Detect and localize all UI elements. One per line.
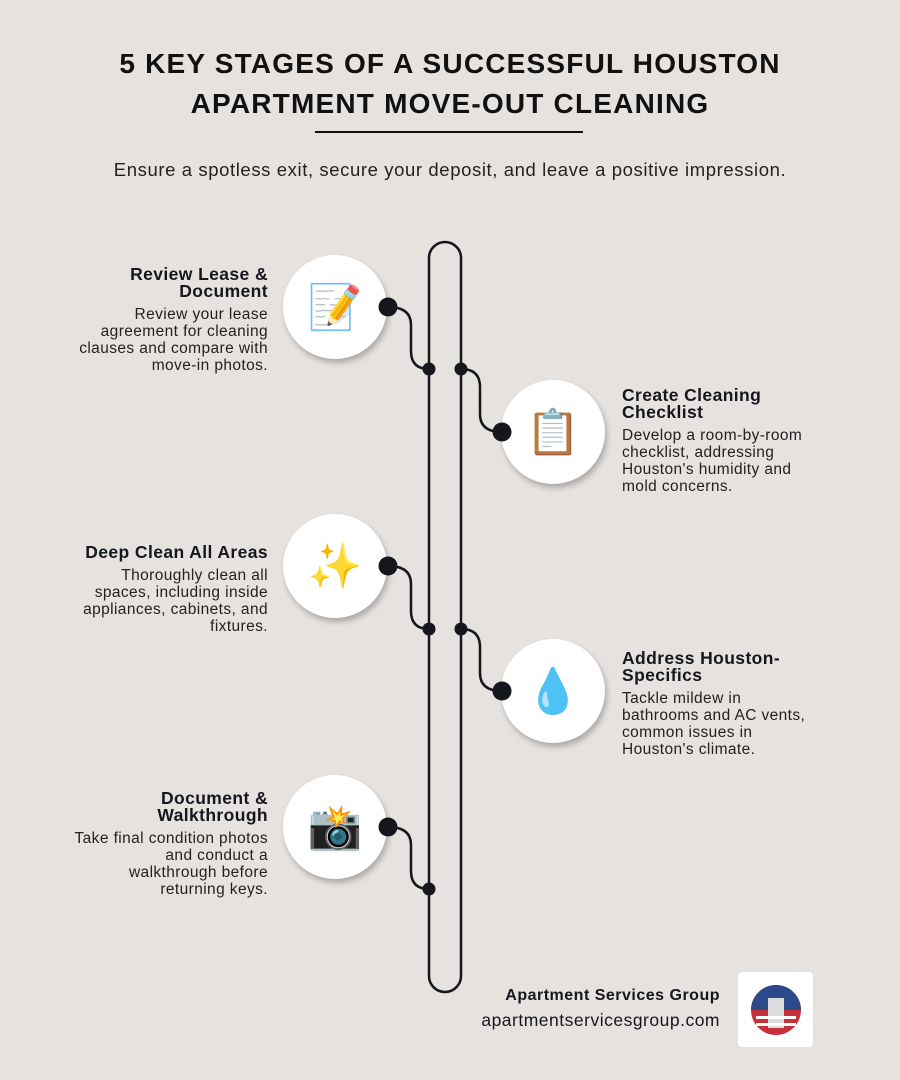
step 5 text: returning keys. bbox=[160, 881, 268, 898]
step 5 text: Document & bbox=[161, 788, 268, 808]
step 1 text: clauses and compare with bbox=[79, 340, 268, 357]
step 4 text: Specifics bbox=[622, 665, 702, 685]
icon: camera bbox=[283, 775, 387, 879]
step 5 text: Walkthrough bbox=[157, 805, 268, 825]
footer brand: Apartment Services Group bbox=[505, 987, 720, 1004]
step 5 text: walkthrough before bbox=[129, 864, 268, 881]
footer brand: apartmentservicesgroup.com bbox=[481, 1010, 720, 1030]
step 3 text: appliances, cabinets, and bbox=[83, 601, 268, 618]
icon: memo: 📝 bbox=[308, 282, 362, 333]
step 4 text: Address Houston- bbox=[622, 648, 780, 668]
icon: sparkles bbox=[283, 514, 387, 618]
icon: water drop bbox=[501, 639, 605, 743]
step 2 text: mold concerns. bbox=[622, 478, 733, 495]
icon: clipboard bbox=[501, 380, 605, 484]
step 1 text: move-in photos. bbox=[152, 357, 268, 374]
icon: clipboard: 📋 bbox=[526, 407, 580, 458]
step 5 text: and conduct a bbox=[165, 847, 268, 864]
step 2 text: Houston's humidity and bbox=[622, 461, 791, 478]
step 1 text: agreement for cleaning bbox=[101, 323, 268, 340]
title underline bbox=[315, 131, 583, 133]
step 1 text bbox=[79, 264, 268, 374]
step 5 text bbox=[74, 788, 268, 898]
subtitle: Ensure a spotless exit, secure your deposit, and leave a positive impression. bbox=[114, 159, 786, 180]
step 4 text: common issues in bbox=[622, 724, 752, 741]
icon: water drop: 💧 bbox=[526, 666, 580, 717]
icon: camera: 📸 bbox=[308, 802, 362, 853]
step 4 text: Houston's climate. bbox=[622, 741, 755, 758]
step 2 text: Create Cleaning bbox=[622, 385, 761, 405]
step 3 text: fixtures. bbox=[210, 618, 268, 635]
step 1 text: Review your lease bbox=[135, 306, 268, 323]
icon: sparkles: ✨ bbox=[308, 541, 362, 592]
step 4 text bbox=[622, 648, 805, 758]
icon: memo bbox=[283, 255, 387, 359]
step 1 text: Document bbox=[179, 281, 268, 301]
step 3 text: spaces, including inside bbox=[95, 584, 268, 601]
step 4 text: bathrooms and AC vents, bbox=[622, 707, 805, 724]
step 1 text: Review Lease & bbox=[130, 264, 268, 284]
step 4 text: Tackle mildew in bbox=[622, 690, 741, 707]
title: APARTMENT MOVE-OUT CLEANING bbox=[191, 88, 709, 119]
step 5 text: Take final condition photos bbox=[75, 830, 268, 847]
step 2 text: checklist, addressing bbox=[622, 444, 774, 461]
step 3 text: Thoroughly clean all bbox=[121, 567, 268, 584]
title: 5 KEY STAGES OF A SUCCESSFUL HOUSTON bbox=[119, 48, 781, 79]
step 2 text: Checklist bbox=[622, 402, 703, 422]
title bbox=[119, 48, 781, 119]
step 2 text bbox=[622, 385, 802, 495]
step 2 text: Develop a room-by-room bbox=[622, 427, 802, 444]
footer brand bbox=[481, 987, 720, 1030]
step 3 text: Deep Clean All Areas bbox=[85, 542, 268, 562]
logo bbox=[738, 972, 813, 1047]
step 3 text bbox=[83, 542, 268, 635]
